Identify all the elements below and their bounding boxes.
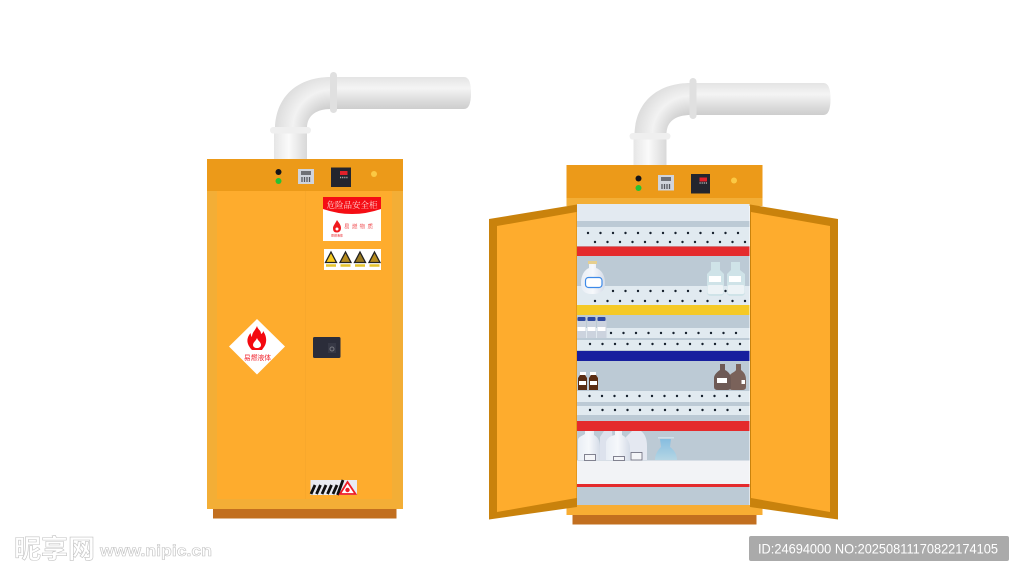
cabinet base bbox=[572, 515, 756, 524]
flammable liquid diamond bbox=[229, 319, 285, 374]
large brown bottles bbox=[714, 364, 746, 390]
left duct pipe bbox=[270, 72, 471, 160]
white plastic jugs bbox=[578, 431, 647, 460]
image id bar: ID:24694000 NO:20250811170822174105 bbox=[758, 540, 998, 556]
perforation dots bbox=[588, 233, 747, 410]
bottom sticker bbox=[310, 480, 357, 495]
blue-cap vials bbox=[577, 317, 606, 338]
right duct pipe bbox=[630, 78, 830, 166]
image id bar bbox=[749, 536, 1009, 561]
control band bbox=[566, 165, 762, 198]
door lock bbox=[313, 337, 340, 358]
warning triangles strip bbox=[324, 249, 381, 270]
hazard sign: safety cabinet bbox=[323, 197, 381, 241]
small brown bottles bbox=[578, 372, 598, 390]
door face bbox=[217, 191, 392, 499]
indicator lights bbox=[636, 176, 642, 191]
yellow light bbox=[731, 178, 737, 184]
hazard sign: safety cabinet: 易燃液体 bbox=[331, 232, 343, 238]
blue glass flask bbox=[655, 437, 677, 460]
shelf: red lower bbox=[577, 421, 750, 431]
left door bbox=[489, 204, 577, 520]
closed cabinet bbox=[207, 159, 403, 518]
digital meter bbox=[658, 175, 674, 190]
indicator lights bbox=[276, 169, 282, 184]
plinth bbox=[566, 505, 762, 515]
hazard sign: safety cabinet: 危险品安全柜 bbox=[326, 200, 378, 210]
yellow light bbox=[371, 171, 377, 177]
open cabinet bbox=[489, 165, 838, 524]
cabinet base bbox=[213, 509, 396, 518]
right door bbox=[750, 204, 838, 520]
control band bbox=[207, 159, 403, 191]
shelf: red bbox=[577, 246, 750, 256]
watermark: site logo bbox=[14, 534, 212, 564]
hazard sign: safety cabinet: 易燃物质 bbox=[344, 222, 373, 230]
watermark: site logo: 昵享网 bbox=[14, 534, 95, 564]
cabinet interior bbox=[577, 204, 750, 505]
glass flask bbox=[581, 261, 605, 294]
shelf: yellow bbox=[577, 305, 750, 315]
watermark: site logo: www.nipic.cn bbox=[99, 543, 212, 560]
cabinet body bbox=[207, 191, 403, 509]
control box bbox=[691, 174, 710, 194]
shelf: blue bbox=[577, 351, 750, 361]
control box bbox=[331, 168, 351, 187]
flammable liquid diamond: 易燃液体 bbox=[244, 353, 271, 362]
perforated strips bbox=[577, 227, 750, 415]
digital meter bbox=[298, 169, 314, 184]
twin reagent bottles bbox=[707, 262, 745, 296]
bottom tray bbox=[577, 460, 750, 487]
